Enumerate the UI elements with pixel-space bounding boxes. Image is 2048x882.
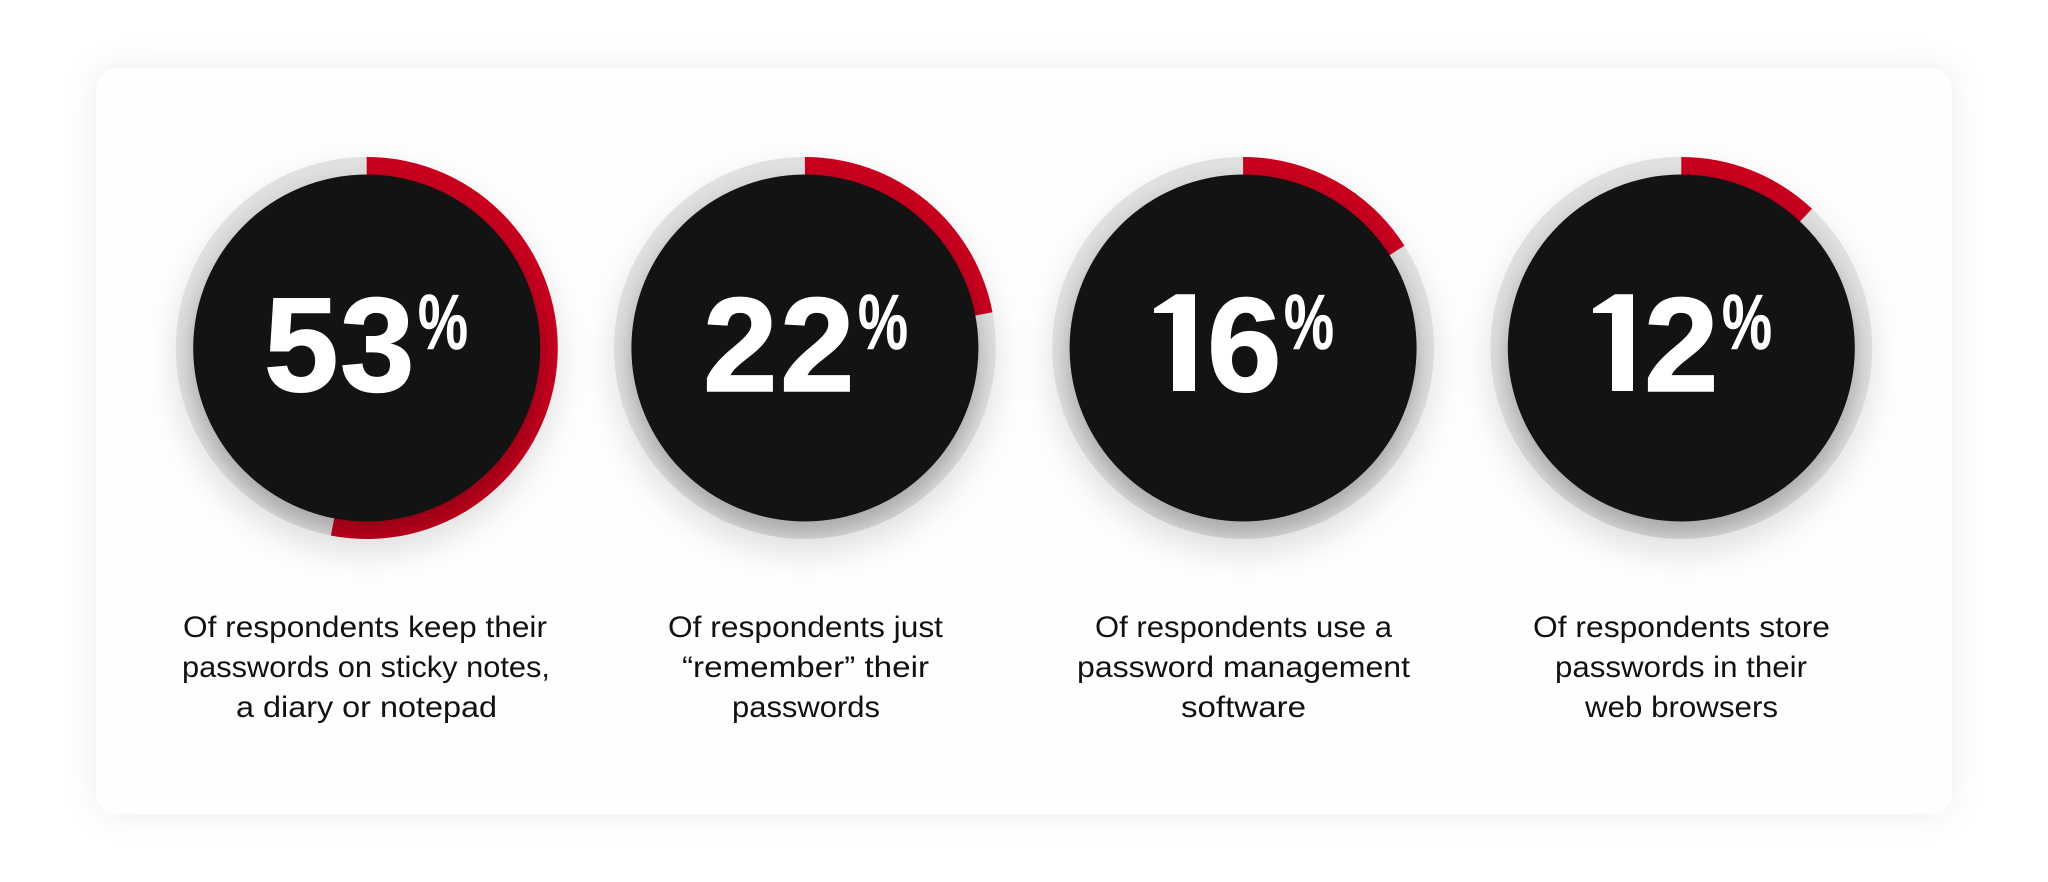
red progress arc 12%: [1681, 157, 1812, 348]
value 53: 53: [264, 271, 415, 420]
caption: Of respondents keep their: [183, 611, 547, 644]
inner shadow on ring: [1067, 184, 1419, 536]
percent sign: %: [1722, 278, 1772, 366]
value 16: [1154, 294, 1278, 393]
red progress arc 22%: [805, 157, 992, 348]
ring track: [1052, 157, 1434, 539]
red progress arc 16%: [1243, 157, 1404, 348]
value 12: 1: [1584, 271, 1659, 420]
value 16: 1: [1145, 271, 1220, 420]
ring track: [1490, 157, 1872, 539]
ring track: [176, 157, 558, 539]
caption: “remember” their: [682, 651, 929, 684]
value 22: 22: [703, 271, 855, 420]
dark disc: [1508, 174, 1855, 522]
caption: [668, 611, 943, 724]
caption: software: [1181, 691, 1306, 724]
dark disc: [193, 174, 540, 522]
stat 1: 53%: [176, 157, 558, 724]
percent sign: %: [418, 278, 468, 366]
caption: Of respondents store: [1533, 611, 1830, 644]
caption: web browsers: [1584, 691, 1778, 724]
inner shadow on ring: [1505, 184, 1857, 536]
caption: a diary or notepad: [236, 691, 497, 724]
percent sign: %: [1284, 278, 1334, 366]
dark disc: [1070, 174, 1417, 522]
caption: passwords on sticky notes,: [182, 651, 550, 684]
caption: passwords: [732, 691, 880, 724]
caption: [182, 611, 550, 724]
red progress arc 53%: [331, 157, 558, 539]
inner shadow on ring: [191, 184, 543, 536]
caption: [1533, 611, 1830, 724]
value 16: 6: [1207, 271, 1282, 420]
caption: password management: [1077, 651, 1410, 684]
stat 4: 12%: [1490, 157, 1872, 724]
panel: white card: [96, 68, 1952, 814]
ring track: [614, 157, 996, 539]
caption: Of respondents use a: [1095, 611, 1393, 644]
stat 3: 16%: [1052, 157, 1434, 724]
caption: Of respondents just: [668, 611, 943, 644]
value 12: 2: [1644, 271, 1719, 420]
stat 2: 22%: [614, 157, 996, 724]
infographic content: [166, 157, 1882, 723]
inner shadow on ring: [629, 184, 981, 536]
percent sign: %: [858, 278, 908, 366]
value 12: [1593, 294, 1714, 392]
dark disc: [631, 174, 978, 522]
caption: passwords in their: [1555, 651, 1807, 684]
caption: [1077, 611, 1410, 724]
